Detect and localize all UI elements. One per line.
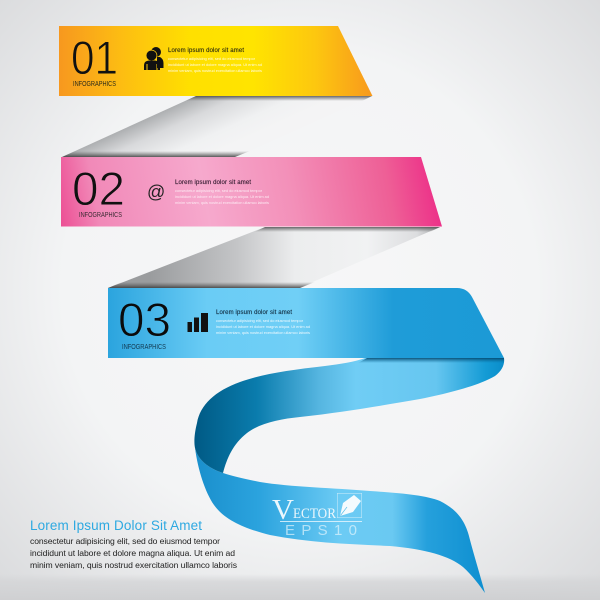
number 02: 02 <box>72 162 125 215</box>
body text <box>30 536 237 570</box>
label: infographics: INFOGRAPHICS <box>73 79 116 88</box>
label: infographics: INFOGRAPHICS <box>122 342 166 351</box>
gray fold between yellow and pink bands <box>62 96 372 157</box>
blue ribbon tail <box>194 358 504 593</box>
body text: minim veniam, quis nostrud exercitation ullamco laboris <box>216 330 310 335</box>
panel: pink band 02 <box>61 157 442 226</box>
text block: lorem ipsum <box>30 518 237 570</box>
body text: consectetur adipisicing elit, sed do eiusmod tempor <box>168 56 256 61</box>
body text: incididunt ut labore et dolore magna aliqua. Ut enim ad <box>30 548 235 558</box>
body text: minim veniam, quis nostrud exercitation ullamco laboris <box>175 200 269 205</box>
body text: consectetur adipisicing elit, sed do eiusmod tempor <box>216 318 304 323</box>
logo: vector eps10: ECTOR <box>293 506 336 522</box>
body text: incididunt ut labore et dolore magna aliqua. Ut enim ad <box>175 194 269 199</box>
panel: yellow band 01 <box>59 26 372 96</box>
logo: vector eps10: EPS10 <box>285 522 357 539</box>
body text <box>175 188 269 205</box>
ribbon upper sweep <box>194 358 504 473</box>
label: infographics: INFOGRAPHICS <box>79 210 122 219</box>
body text: consectetur adipisicing elit, sed do eiusmod tempor <box>175 188 263 193</box>
number 03: 03 <box>118 293 171 346</box>
gray fold between pink and blue bands <box>108 227 440 288</box>
logo: vector eps10: V <box>272 494 294 526</box>
heading: Lorem ipsum dolor sit amet <box>216 310 292 316</box>
heading: Lorem ipsum dolor sit amet <box>168 48 244 54</box>
heading: Lorem ipsum dolor sit amet <box>175 180 251 186</box>
body text <box>216 318 310 335</box>
panel: blue band 03 <box>108 288 504 358</box>
body text: incididunt ut labore et dolore magna aliqua. Ut enim ad <box>168 62 262 67</box>
logo: vector eps10 <box>272 493 362 539</box>
icon: pen nib <box>337 493 362 518</box>
number 01: 01 <box>71 31 118 84</box>
heading: Lorem Ipsum Dolor Sit Amet <box>30 518 202 533</box>
ribbon fold shadow <box>358 358 504 363</box>
body text <box>168 56 262 73</box>
icon: bar chart <box>188 313 208 332</box>
body text: consectetur adipisicing elit, sed do eiusmod tempor <box>30 536 220 546</box>
ribbon lower sweep <box>195 448 485 593</box>
body text: minim veniam, quis nostrud exercitation ullamco laboris <box>30 560 237 570</box>
body text: incididunt ut labore et dolore magna aliqua. Ut enim ad <box>216 324 310 329</box>
icon: people <box>144 47 164 70</box>
icon: at sign: @ <box>147 182 165 202</box>
body text: minim veniam, quis nostrud exercitation ullamco laboris <box>168 68 262 73</box>
